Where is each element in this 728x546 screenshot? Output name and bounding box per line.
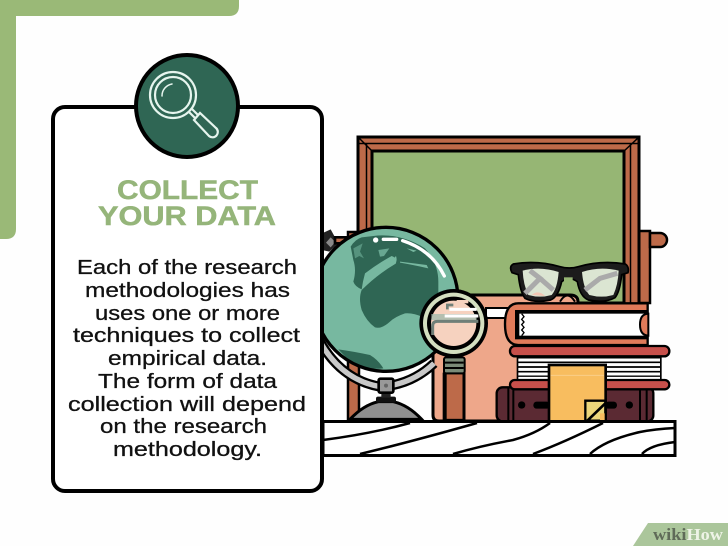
body text: empirical data.: [108, 347, 267, 370]
peach paper: [433, 295, 578, 421]
illustration: globe: [314, 227, 458, 419]
sticky note: [549, 365, 606, 422]
illustration: book stack: [497, 303, 669, 422]
highlight: [403, 241, 444, 276]
side legs and knobs: [348, 232, 359, 422]
body text: [68, 256, 306, 461]
middle book covers: [510, 346, 669, 356]
bottom book: [497, 387, 653, 421]
logo: wikiHow: [633, 523, 728, 546]
body text: Each of the research: [77, 256, 297, 279]
stand ring: [320, 342, 380, 387]
body text: techniques to collect: [73, 324, 300, 347]
body text: collection will depend: [68, 393, 306, 416]
title: COLLECT: [117, 175, 259, 205]
middle book pages: [517, 356, 662, 381]
body text: methodologies has: [85, 279, 290, 302]
top book: [505, 303, 648, 345]
illustration: magnifying glass: [419, 289, 488, 420]
top clamp: [322, 229, 338, 252]
title: [98, 175, 276, 231]
body text: uses one or more: [95, 302, 280, 325]
body text: The form of data: [98, 370, 278, 393]
frame: [358, 137, 639, 307]
ball: [314, 227, 458, 371]
continents: [338, 235, 438, 369]
illustration: eyeglasses: [511, 262, 628, 302]
illustration: chalkboard: [348, 137, 667, 422]
icon: magnifying glass badge: [136, 55, 238, 157]
body text: methodology.: [113, 438, 262, 461]
title: YOUR DATA: [98, 201, 276, 231]
illustration: wooden shelf: [323, 422, 675, 456]
panel: text card: [53, 107, 322, 491]
logo: wikiHow: wikiHow: [653, 525, 724, 544]
base: [350, 402, 422, 419]
green corner frame: [0, 0, 239, 239]
body text: on the research: [100, 415, 267, 438]
